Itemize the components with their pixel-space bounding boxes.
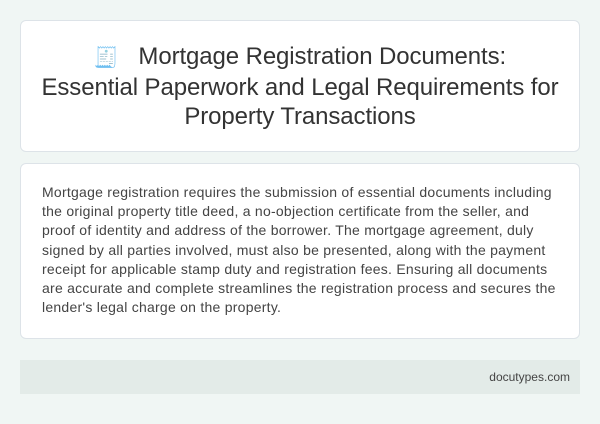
footer: docutypes.com — [489, 370, 570, 384]
title — [41, 42, 558, 130]
description text: lender's legal charge on the property. — [42, 299, 281, 315]
footer — [20, 360, 580, 394]
description text: receipt for applicable stamp duty and registration fees. Ensuring all documents — [42, 261, 547, 277]
body text card — [20, 163, 580, 339]
title card — [20, 20, 580, 152]
title: Essential Paperwork and Legal Requirements for — [41, 74, 558, 100]
description text: proof of identity and address of the borrower. The mortgage agreement, duly — [42, 222, 534, 238]
description text: signed by all parties involved, must also be presented, along with the payment — [42, 242, 546, 258]
description text: the original property title deed, a no-objection certificate from the seller, and — [42, 203, 529, 219]
title: 🧾 Mortgage Registration Documents: — [94, 42, 506, 70]
description text: are accurate and complete streamlines the registration process and secures the — [42, 280, 556, 296]
description text: Mortgage registration requires the submission of essential documents including — [42, 184, 552, 200]
description text — [42, 184, 556, 315]
title: Property Transactions — [184, 102, 416, 130]
